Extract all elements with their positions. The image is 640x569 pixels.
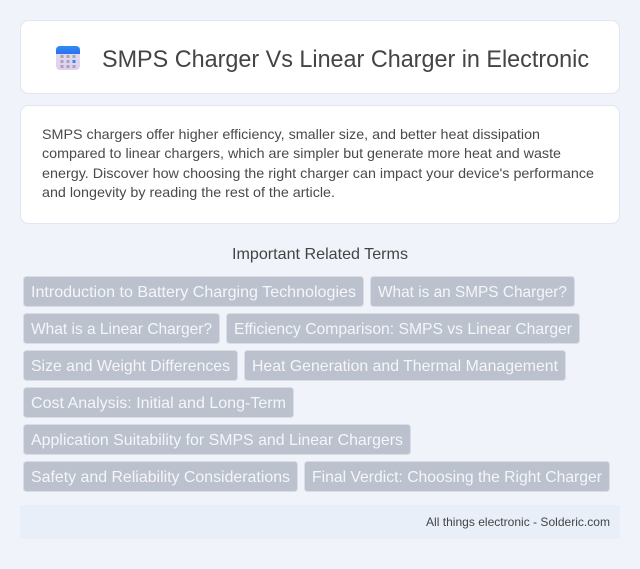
tag: Heat Generation and Thermal Management: [252, 358, 559, 375]
tag: [24, 462, 298, 492]
tag: Final Verdict: Choosing the Right Charger: [312, 469, 603, 486]
tag: Size and Weight Differences: [31, 358, 230, 375]
summary text: [42, 126, 594, 200]
panel: header: [20, 20, 620, 94]
heading: related terms: Important Related Terms: [232, 246, 408, 263]
summary text: compared to linear chargers, which are simpler but generate more heat and waste: [42, 145, 561, 161]
tag: [24, 276, 364, 306]
tag: [244, 350, 566, 380]
tag: [304, 462, 610, 492]
title: SMPS Charger Vs Linear Charger in Electronic: [102, 46, 589, 73]
footer: [20, 505, 620, 539]
tag: [24, 388, 294, 418]
tag: [226, 314, 580, 344]
summary text: energy. Discover how choosing the right charger can impact your device's performance: [42, 165, 594, 181]
summary text: and longevity by reading the rest of the article.: [42, 184, 335, 200]
tag: [370, 276, 574, 306]
tag: What is a Linear Charger?: [31, 321, 212, 338]
icon: calendar: [56, 46, 80, 70]
footer: All things electronic - Solderic.com: [426, 515, 610, 529]
tag: Safety and Reliability Considerations: [31, 469, 290, 486]
tag: Application Suitability for SMPS and Linear Chargers: [31, 432, 403, 449]
tag: Introduction to Battery Charging Technologies: [31, 284, 356, 301]
tag: [24, 314, 220, 344]
panel: summary: [20, 106, 620, 224]
tag list: [24, 276, 610, 492]
summary text: SMPS chargers offer higher efficiency, smaller size, and better heat dissipation: [42, 126, 540, 142]
tag: Cost Analysis: Initial and Long-Term: [31, 395, 286, 412]
tag: Efficiency Comparison: SMPS vs Linear Charger: [234, 321, 573, 338]
tag: What is an SMPS Charger?: [378, 284, 567, 301]
tag: [24, 424, 410, 454]
tag: [24, 350, 238, 380]
